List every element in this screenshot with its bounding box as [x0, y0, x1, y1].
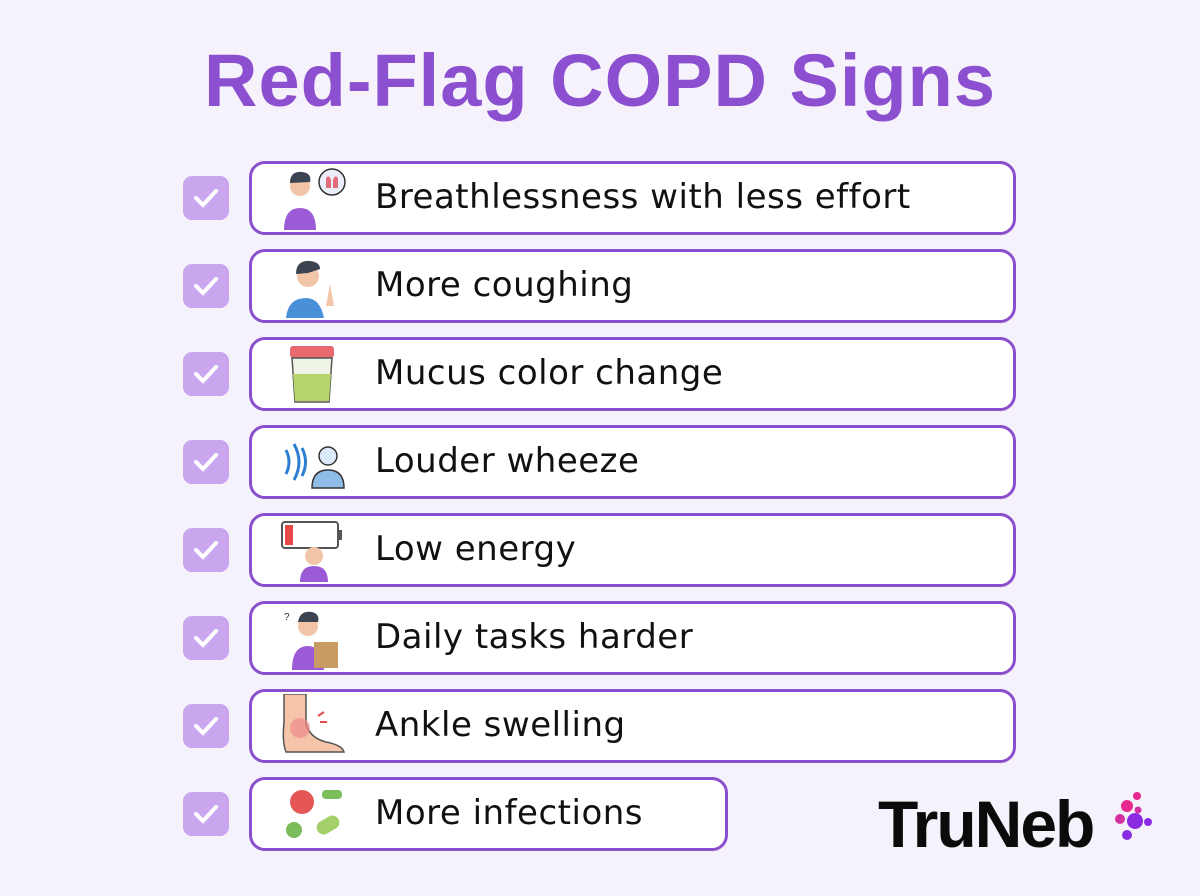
title: Red-Flag COPD Signs	[204, 39, 996, 122]
checkbox	[183, 352, 229, 396]
item box	[249, 337, 1016, 411]
checkbox	[183, 792, 229, 836]
icon: grocery bag person	[284, 612, 338, 670]
item box	[249, 425, 1016, 499]
item box	[249, 161, 1016, 235]
row: mucus	[183, 337, 1016, 411]
item box	[249, 601, 1016, 675]
checkbox	[183, 528, 229, 572]
label: More infections	[375, 793, 643, 833]
checkbox	[183, 440, 229, 484]
checkbox	[183, 616, 229, 660]
item box	[249, 689, 1016, 763]
row: infections	[183, 777, 728, 851]
item box	[249, 249, 1016, 323]
label: Ankle swelling	[375, 705, 626, 745]
item box	[249, 777, 728, 851]
label: Breathlessness with less effort	[375, 177, 911, 217]
label: Louder wheeze	[375, 441, 639, 481]
checkbox	[183, 264, 229, 308]
icon: low battery person	[281, 521, 342, 582]
label: Daily tasks harder	[375, 617, 693, 657]
logo: TruNeb: TruNeb	[878, 787, 1093, 861]
item box	[249, 513, 1016, 587]
label: Low energy	[375, 529, 576, 569]
label: Mucus color change	[375, 353, 723, 393]
icon: swollen ankle	[282, 694, 345, 753]
label: More coughing	[375, 265, 633, 305]
icon: mucus cup	[290, 346, 334, 403]
icon: germs	[286, 790, 342, 838]
checkbox	[183, 704, 229, 748]
row: coughing	[183, 249, 1016, 323]
row: breathlessness	[183, 161, 1016, 235]
icon: breathless person	[284, 168, 346, 230]
row: wheeze	[183, 425, 1016, 499]
icon: coughing person	[286, 260, 334, 318]
row: low energy	[183, 513, 1016, 587]
icon: grocery bag person: ?	[284, 612, 290, 623]
checkbox	[183, 176, 229, 220]
icon: wheeze	[284, 443, 345, 489]
row: daily tasks	[183, 601, 1016, 675]
row: ankle	[183, 689, 1016, 763]
